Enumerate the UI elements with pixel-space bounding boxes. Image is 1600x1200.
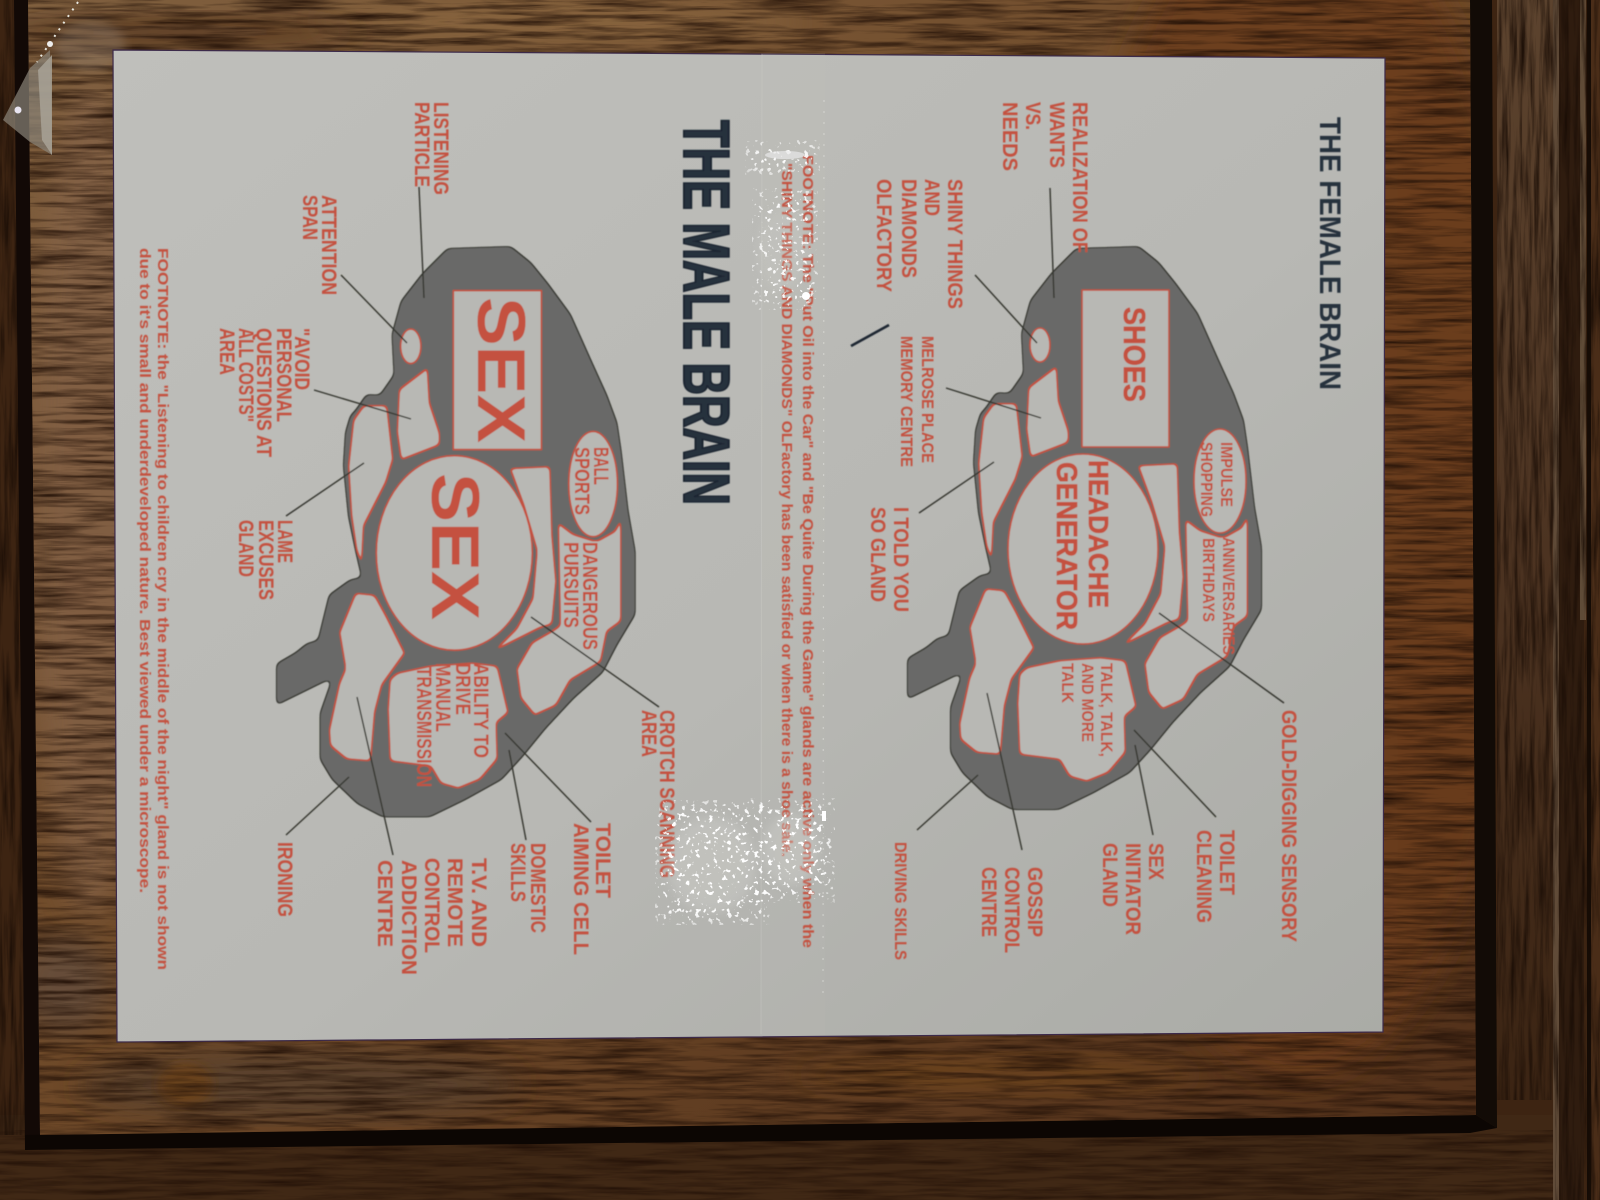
brain text: manual: MANUAL: [431, 663, 454, 732]
brain outline: [907, 246, 1262, 810]
label: toilet cleaning: TOILET: [1215, 830, 1238, 895]
label: i told you so gland: I TOLD YOU: [889, 507, 912, 612]
region: shoes: [1082, 290, 1169, 447]
label: lame excuses gland: LAME: [273, 520, 296, 563]
brain text: dangerous: DANGEROUS: [578, 542, 601, 650]
brain text: pursuits: PURSUITS: [559, 542, 582, 628]
label: tv and remote control addiction centre: CENTRE: [373, 860, 396, 947]
heading: the male brain: THE MALE BRAIN: [670, 120, 743, 505]
label: crotch scanning area: AREA: [637, 710, 660, 757]
brain text: anniversaries: ANNIVERSARIES: [1219, 537, 1238, 655]
footnote: female brain: [778, 155, 816, 948]
label: gold-digging sensory: GOLD-DIGGING SENSORY: [1277, 710, 1300, 942]
label: toilet cleaning: CLEANING: [1192, 830, 1215, 923]
brain text: talk talk: TALK, TALK,: [1097, 663, 1116, 757]
region: dangerous pursuits: [516, 516, 621, 716]
label: avoid personal questions at all costs area: [215, 328, 313, 457]
label: toilet aiming cell: AIMING CELL: [569, 823, 592, 955]
label: domestic skills: SKILLS: [506, 843, 529, 902]
label: shiny things and diamonds olfactory: OLFACTORY: [872, 179, 895, 292]
region: talk: [1017, 657, 1137, 782]
label: attention span: [298, 195, 340, 295]
label: listening particle: LISTENING: [429, 102, 452, 195]
brain text: sports: SPORTS: [570, 447, 593, 515]
label: toilet cleaning: [1192, 830, 1238, 923]
region: manual transmission: [387, 662, 509, 789]
label: melrose place memory centre: [897, 336, 937, 467]
heading: the female brain: THE FEMALE BRAIN: [1313, 117, 1346, 390]
brain text: ball: BALL: [589, 447, 612, 485]
label: shiny things and diamonds olfactory: SHINY THINGS: [943, 179, 966, 309]
label: i told you so gland: SO GLAND: [866, 507, 889, 602]
region: sex oval: [376, 456, 532, 650]
label: realization of wants vs needs: WANTS: [1045, 102, 1068, 168]
label: gossip control centre: [977, 867, 1046, 953]
brain diagram: male: [276, 246, 636, 817]
label: melrose place memory centre: MEMORY CENTRE: [897, 336, 916, 467]
label: realization of wants vs needs: [998, 102, 1091, 253]
panel: the male brain: [136, 102, 743, 975]
region: gossip control centre: [959, 588, 1035, 755]
label: tv and remote control addiction centre: T.V. AND: [467, 858, 490, 947]
brain text: sex in oval: SEX: [417, 473, 493, 620]
label: gossip control centre: CENTRE: [977, 867, 1000, 937]
label: lame excuses gland: EXCUSES: [254, 520, 277, 600]
region: ball sports: [569, 431, 617, 537]
label: crotch scanning area: CROTCH SCANNING: [655, 710, 678, 878]
brain diagram: female: [907, 246, 1262, 810]
label: shiny things and diamonds olfactory: [872, 179, 966, 309]
footnote: female brain: "SHINY THINGS AND DIAMONDS" OLFactory has been satisfied or when there is a shoe sale.: [778, 163, 795, 857]
label: gossip control centre: GOSSIP: [1023, 867, 1046, 937]
brain text: headache: HEADACHE: [1083, 460, 1114, 608]
panel: the female brain: [778, 102, 1346, 960]
label: shiny things and diamonds olfactory: AND: [920, 179, 943, 216]
label: realization of wants vs needs: VS.: [1021, 102, 1044, 130]
label: melrose place memory centre: MELROSE PLACE: [918, 336, 937, 463]
label: avoid personal questions at all costs area: ALL COSTS": [234, 328, 257, 422]
label: gossip control centre: CONTROL: [1000, 867, 1023, 953]
label: sex initiator gland: INITIATOR: [1121, 843, 1144, 935]
region: gold-digging sensory: [1119, 463, 1184, 648]
glare on tape: bottom: [655, 798, 835, 925]
brain shapes: [276, 246, 636, 817]
brain text: drive: DRIVE: [451, 663, 474, 715]
label: listening particle: PARTICLE: [410, 102, 433, 187]
brain text: impulse: IMPULSE: [1217, 442, 1236, 507]
brain text: talk: TALK: [1058, 663, 1077, 704]
brain text: generator: GENERATOR: [1050, 462, 1082, 630]
region: anniversaries birthdays: [1144, 513, 1248, 710]
label: domestic skills: [506, 843, 549, 933]
label: sex initiator gland: GLAND: [1098, 843, 1121, 907]
brain text: shoes: SHOES: [1117, 307, 1152, 402]
brain text: and more: AND MORE: [1078, 663, 1097, 742]
label: i told you so gland: [866, 507, 912, 612]
label: lame excuses gland: [234, 520, 296, 600]
label: shiny things and diamonds olfactory: DIAMONDS: [897, 179, 920, 278]
glare on tape: top: [745, 140, 820, 310]
region: shiny things oval: [1030, 328, 1050, 362]
label: sex initiator gland: [1098, 843, 1167, 935]
brain text: transmission: TRANSMISSION: [412, 667, 435, 787]
tape strip across paper fold: [761, 53, 825, 1035]
label: realization of wants vs needs: NEEDS: [998, 102, 1021, 171]
label: toilet aiming cell: TOILET: [591, 823, 614, 898]
label: tv and remote control addiction centre: CONTROL: [420, 858, 443, 953]
label: tv and remote control addiction centre: ADDICTION: [397, 860, 420, 975]
region: tv remote control: [329, 592, 406, 762]
label: realization of wants vs needs: REALIZATION OF: [1068, 102, 1091, 253]
label: lame excuses gland: GLAND: [234, 520, 257, 577]
label: listening particle: [410, 102, 452, 195]
paper sheet: [113, 50, 1385, 1042]
region: impulse shopping: [1194, 429, 1246, 533]
tape: top left corner: [3, 2, 125, 155]
label: ironing: IRONING: [273, 842, 296, 917]
label: attention span: ATTENTION: [317, 195, 340, 295]
region: lame excuses: [348, 405, 394, 567]
label: domestic skills: DOMESTIC: [526, 843, 549, 933]
footnote: female brain: FOOTNOTE: The "Put Oil into the Car" and "Be Quite During the Game" glands are active only when the: [799, 155, 816, 948]
footnote: male brain: due to it's small and underdeveloped nature. Best viewed under a microscope.: [136, 248, 153, 893]
label: avoid personal questions at all costs area: QUESTIONS AT: [252, 328, 275, 457]
label: avoid personal questions at all costs area: PERSONAL: [272, 328, 295, 422]
brain text: birthdays: BIRTHDAYS: [1199, 538, 1218, 622]
region: avoid personal questions: [397, 367, 440, 461]
region: i told you so: [978, 403, 1023, 563]
label: crotch scanning area: [637, 710, 678, 878]
label: avoid personal questions at all costs area: "AVOID: [290, 328, 313, 390]
label: avoid personal questions at all costs area: AREA: [215, 328, 238, 375]
label: attention span: SPAN: [298, 195, 321, 240]
leader lines: male: [286, 187, 659, 855]
region: sex rectangle: [453, 291, 541, 450]
label: tv and remote control addiction centre: [373, 858, 490, 975]
brain text: shopping: SHOPPING: [1197, 442, 1216, 517]
footnote: male brain: [136, 248, 171, 970]
region: crotch scanning area: [491, 466, 557, 653]
label: toilet aiming cell: [569, 823, 614, 955]
label: driving skills: DRIVING SKILLS: [891, 842, 910, 960]
footnote: male brain: FOOTNOTE: the "Listening to children cry in the middle of the night" gland is not shown: [154, 248, 171, 970]
label: sex initiator gland: SEX: [1144, 843, 1167, 880]
leader lines: female: [851, 188, 1284, 850]
region: melrose place: [1026, 365, 1069, 458]
region: attention span oval: [401, 329, 421, 364]
label: tv and remote control addiction centre: REMOTE: [443, 858, 466, 947]
brain outline: [276, 246, 636, 817]
brain text: ability to: ABILITY TO: [469, 663, 492, 758]
region: headache generator: [1008, 454, 1158, 644]
brain text: sex in rectangle: SEX: [463, 297, 539, 443]
